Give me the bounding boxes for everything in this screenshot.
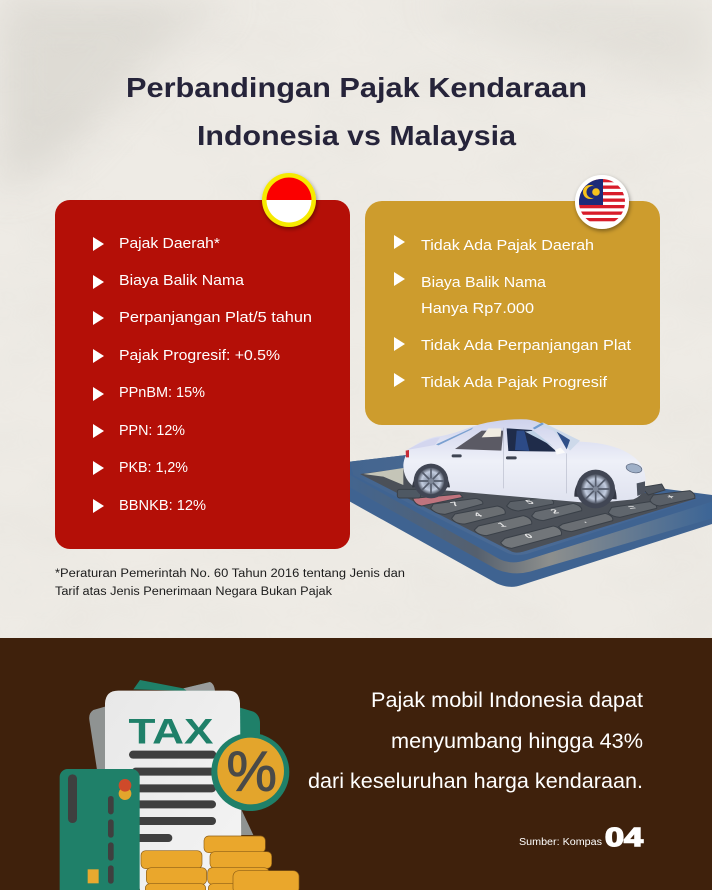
source credit: Sumber: Kompas xyxy=(519,837,602,848)
list: Indonesia taxes: PPN: 12% xyxy=(119,422,185,439)
list: Malaysia taxes: Tidak Ada Perpanjangan Plat xyxy=(421,337,632,354)
list: Indonesia taxes: BBNKB: 12% xyxy=(119,497,206,514)
title: Perbandingan Pajak Kendaraan xyxy=(126,72,587,103)
page number: 04 xyxy=(605,822,644,852)
coin stacks xyxy=(141,836,299,890)
percent badge: % xyxy=(226,741,277,804)
title: Indonesia vs Malaysia xyxy=(197,120,516,151)
key labels: 1 xyxy=(496,521,510,529)
document xyxy=(105,691,242,890)
footnote xyxy=(55,568,405,598)
list: Malaysia taxes: Biaya Balik Nama xyxy=(421,274,547,291)
list: Malaysia taxes: Tidak Ada Pajak Progresif xyxy=(421,374,608,391)
bullets: Malaysia xyxy=(394,235,405,387)
key labels: = xyxy=(626,504,639,511)
textured paper background xyxy=(0,0,712,640)
key labels: . xyxy=(579,518,590,525)
list: Indonesia taxes xyxy=(119,235,312,514)
calculator keys xyxy=(397,484,695,548)
list: Malaysia taxes xyxy=(421,237,632,391)
document lines xyxy=(129,751,216,842)
key labels: 2 xyxy=(548,508,562,515)
callout: 43% statement: dari keseluruhan harga kendaraan. xyxy=(308,770,643,793)
footnote: Tarif atas Jenis Penerimaan Negara Bukan Pajak xyxy=(55,586,332,598)
panel: bottom band xyxy=(0,638,712,890)
callout: 43% statement: menyumbang hingga 43% xyxy=(391,730,643,753)
car xyxy=(403,419,646,508)
icon: Indonesia flag xyxy=(262,173,316,227)
key labels: + xyxy=(664,494,678,501)
key labels: 7 xyxy=(448,501,462,508)
list: Indonesia taxes: PKB: 1,2% xyxy=(119,459,188,476)
callout: 43% statement: Pajak mobil Indonesia dapat xyxy=(371,689,643,712)
TAX heading on document: TAX xyxy=(128,712,214,751)
percent badge xyxy=(211,733,289,811)
list: Indonesia taxes: PPnBM: 15% xyxy=(119,384,205,401)
key labels xyxy=(448,494,678,540)
key labels: 5 xyxy=(523,499,537,506)
list: Indonesia taxes: Biaya Balik Nama xyxy=(119,272,245,289)
calculator body xyxy=(350,455,712,587)
list: Indonesia taxes: Perpanjangan Plat/5 tahun xyxy=(119,309,312,326)
title xyxy=(126,72,587,151)
panel: Indonesia xyxy=(55,200,350,549)
key labels: 0 xyxy=(522,533,536,540)
list: Malaysia taxes: Tidak Ada Pajak Daerah xyxy=(421,237,594,254)
bullets: Indonesia xyxy=(93,237,104,513)
list: Malaysia taxes: Hanya Rp7.000 xyxy=(421,300,534,317)
credit card xyxy=(60,769,140,890)
footnote: *Peraturan Pemerintah No. 60 Tahun 2016 tentang Jenis dan xyxy=(55,568,405,580)
list: Indonesia taxes: Pajak Daerah* xyxy=(119,235,220,252)
back sheets xyxy=(89,680,260,835)
panel: Malaysia xyxy=(365,201,660,425)
list: Indonesia taxes: Pajak Progresif: +0.5% xyxy=(119,347,280,364)
illustration: car on calculator xyxy=(350,419,712,587)
key labels: 4 xyxy=(472,511,486,519)
illustration: tax document, card, coins xyxy=(60,680,299,890)
callout: 43% statement xyxy=(308,689,643,793)
icon: Malaysia flag xyxy=(575,175,629,229)
